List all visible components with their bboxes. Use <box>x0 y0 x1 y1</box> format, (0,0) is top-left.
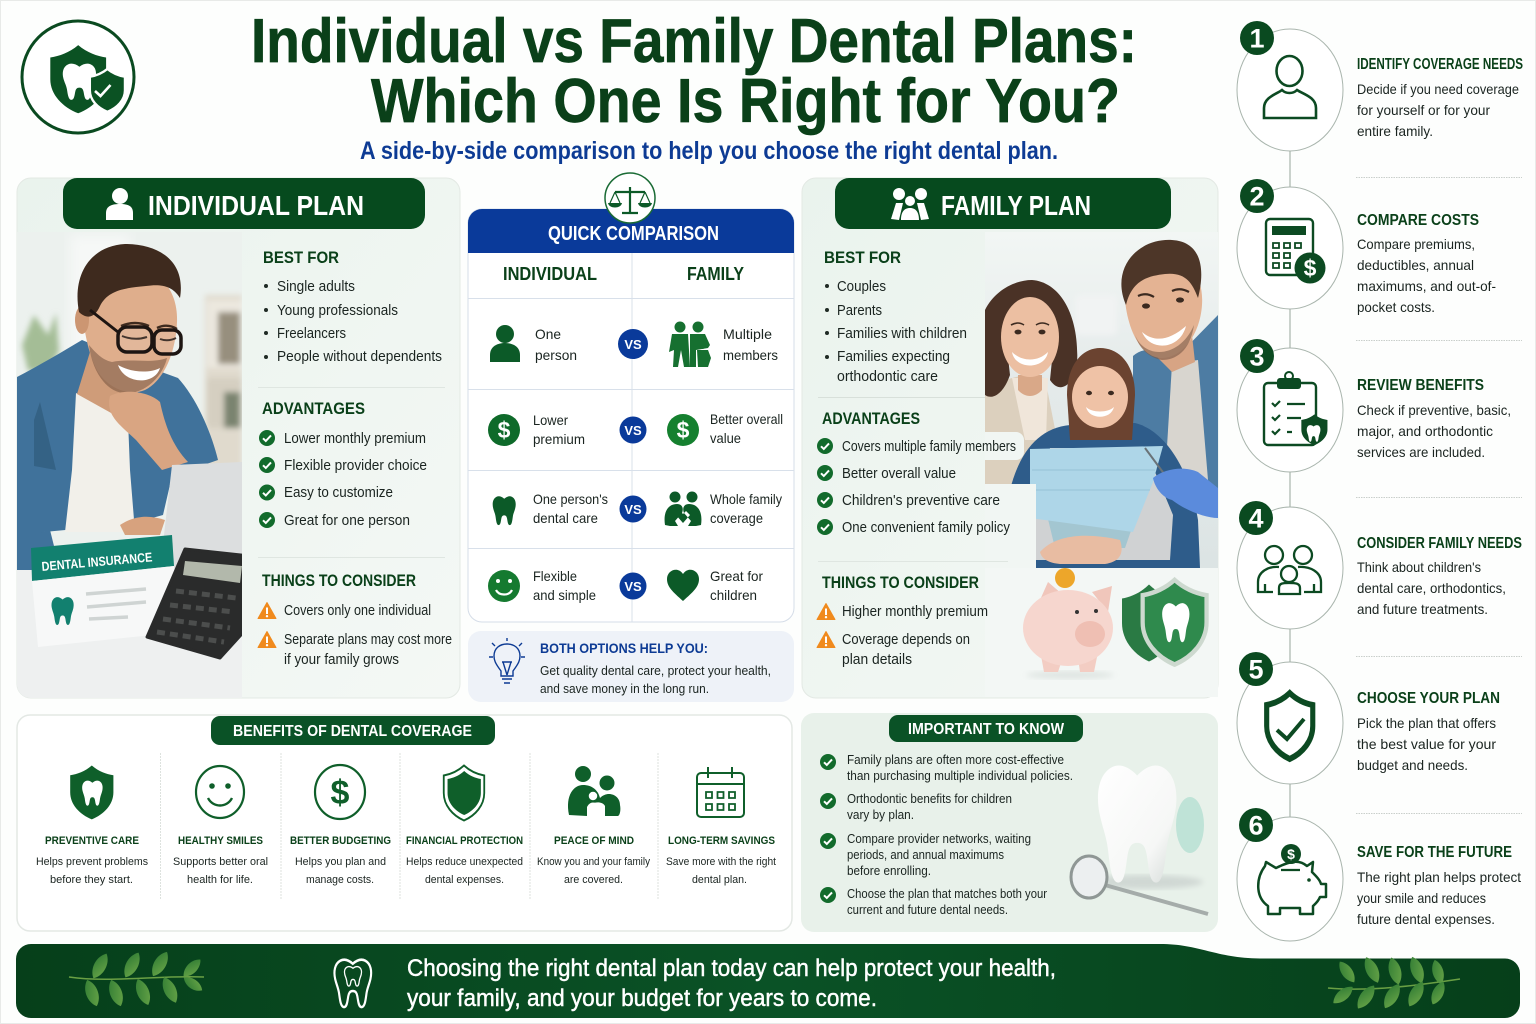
list: best for: Single adults <box>277 279 355 295</box>
list: best for: Young professionals <box>277 303 398 319</box>
step 5 <box>1237 652 1500 784</box>
benefit: preventive care: Helps prevent problems <box>36 856 148 868</box>
step 2: 2 <box>1249 182 1265 212</box>
chair <box>1010 423 1200 568</box>
row: people: person <box>535 347 577 363</box>
step 5: budget and needs. <box>1357 757 1468 773</box>
benefit: preventive care <box>36 765 148 886</box>
step 1: 1 <box>1249 24 1265 54</box>
step 1: Decide if you need coverage <box>1357 81 1519 97</box>
list: things to consider <box>258 571 452 668</box>
benefit: peace of mind <box>537 766 650 886</box>
banner: closing message <box>16 944 1520 1018</box>
step 5: CHOOSE YOUR PLAN <box>1357 690 1500 707</box>
list: important facts: Orthodontic benefits for children <box>847 792 1012 806</box>
illustration: tooth shield <box>1122 580 1207 665</box>
benefit: healthy smiles: HEALTHY SMILES <box>178 835 263 847</box>
benefit: long-term savings: LONG-TERM SAVINGS <box>668 835 775 847</box>
step 5: 5 <box>1248 654 1264 684</box>
benefit: financial protection <box>406 766 523 886</box>
benefit: long-term savings <box>666 767 776 886</box>
row: flexibility: VS <box>624 579 642 594</box>
header: individual plan: INDIVIDUAL PLAN <box>148 190 364 221</box>
icon: tooth outline <box>334 960 371 1007</box>
list: advantages: One convenient family policy <box>842 520 1011 536</box>
list: best for: People without dependents <box>277 349 442 365</box>
panel: benefits of dental coverage <box>17 715 792 931</box>
row: premium: Better overall <box>710 411 783 427</box>
header: benefits <box>211 716 495 745</box>
list: advantages: ADVANTAGES <box>262 399 365 418</box>
step 1: for yourself or for your <box>1357 102 1490 118</box>
benefit: healthy smiles: Supports better oral <box>173 856 268 868</box>
illustration: tooth and dental mirror <box>1071 766 1208 914</box>
row: care: VS <box>624 502 642 517</box>
list: advantages: Flexible provider choice <box>284 458 427 474</box>
step 6: 6 <box>1248 810 1264 840</box>
benefit: better budgeting <box>290 765 391 886</box>
step 2: $ <box>1304 255 1317 281</box>
benefit: better budgeting: Helps you plan and <box>295 856 386 868</box>
step 6: SAVE FOR THE FUTURE <box>1357 844 1512 861</box>
row: care: Whole family <box>710 491 782 507</box>
icon: left leaf branch <box>69 949 205 1008</box>
benefit: preventive care: before they start. <box>50 874 133 886</box>
row: people: One <box>535 326 561 342</box>
title: Which One Is Right for You? <box>371 67 1120 136</box>
list: best for: BEST FOR <box>824 248 901 267</box>
list: advantages <box>259 399 427 529</box>
header: individual plan <box>63 178 425 229</box>
benefit: financial protection: FINANCIAL PROTECTION <box>406 835 523 847</box>
list: important facts: Choose the plan that matches both your <box>847 887 1047 901</box>
row: premium: VS <box>624 423 642 438</box>
list: advantages: Children's preventive care <box>842 493 1000 509</box>
list: advantages: Better overall value <box>842 466 956 482</box>
list: things to consider <box>817 573 988 668</box>
row: people: VS <box>624 337 642 352</box>
step 2: deductibles, annual <box>1357 257 1474 273</box>
benefit: financial protection: Helps reduce unexpected <box>406 856 523 868</box>
list: important facts: than purchasing multiple individual policies. <box>847 769 1073 783</box>
benefit: financial protection: dental expenses. <box>425 874 504 886</box>
list: things to consider: THINGS TO CONSIDER <box>262 571 416 590</box>
girl <box>1067 348 1135 440</box>
list: important facts: current and future dental needs. <box>847 903 1008 917</box>
step 4: Think about children's <box>1357 559 1481 575</box>
illustration: piggy bank <box>1023 568 1114 679</box>
step 6: your smile and reduces <box>1357 890 1486 906</box>
header: important <box>889 715 1083 742</box>
step 4: and future treatments. <box>1357 601 1488 617</box>
list: important facts: before enrolling. <box>847 864 931 878</box>
benefit: healthy smiles <box>173 766 268 886</box>
man <box>1133 315 1218 500</box>
row: care: One person's <box>533 491 608 507</box>
benefit: peace of mind: PEACE OF MIND <box>554 835 634 847</box>
benefit: preventive care: PREVENTIVE CARE <box>45 835 139 847</box>
steps column <box>1237 21 1523 941</box>
step 1 <box>1237 21 1523 151</box>
cut-out behind family advantages <box>985 432 1036 570</box>
list: things to consider: Higher monthly premium <box>842 604 988 620</box>
row: people <box>490 322 778 367</box>
header: family plan: FAMILY PLAN <box>941 190 1091 221</box>
step 6: The right plan helps protect <box>1357 869 1521 885</box>
list: things to consider: Coverage depends on <box>842 632 970 648</box>
benefit: better budgeting: BETTER BUDGETING <box>290 835 391 847</box>
row: premium: Lower <box>533 412 568 428</box>
row: premium: $ <box>677 417 690 443</box>
list: advantages: Easy to customize <box>284 485 393 501</box>
list: best for <box>263 248 442 365</box>
benefit: long-term savings: dental plan. <box>692 874 747 886</box>
benefit: peace of mind: are covered. <box>564 874 623 886</box>
subtitle: A side-by-side comparison to help you choose the right dental plan. <box>360 137 1058 165</box>
row: premium: value <box>710 430 741 446</box>
callout: both options help you: BOTH OPTIONS HELP YOU: <box>540 640 708 656</box>
step 3: services are included. <box>1357 444 1485 460</box>
icon: balance scale <box>605 173 655 223</box>
list: best for: BEST FOR <box>263 248 339 267</box>
step 6: future dental expenses. <box>1357 911 1495 927</box>
step 4: dental care, orthodontics, <box>1357 580 1506 596</box>
banner text <box>407 955 1056 1012</box>
step 1: entire family. <box>1357 123 1433 139</box>
panel: quick comparison <box>468 173 794 622</box>
panel: family plan <box>802 178 1218 698</box>
benefit: better budgeting: manage costs. <box>306 874 374 886</box>
step 3: REVIEW BENEFITS <box>1357 377 1484 394</box>
list: important facts: Compare provider networks, waiting <box>847 832 1031 846</box>
step 2: maximums, and out-of- <box>1357 278 1496 294</box>
step 2: Compare premiums, <box>1357 236 1475 252</box>
row: flexibility <box>488 568 763 603</box>
row: flexibility: Great for <box>710 568 763 584</box>
list: important facts: vary by plan. <box>847 808 914 822</box>
list: advantages: Covers multiple family members <box>842 439 1016 455</box>
panel: important to know <box>801 713 1218 932</box>
row: flexibility: Flexible <box>533 568 577 584</box>
icon: right leaf branch <box>1328 955 1460 1012</box>
benefit: better budgeting: $ <box>331 774 350 812</box>
panel: quick comparison: INDIVIDUAL <box>503 264 597 284</box>
step 6: $ <box>1287 846 1295 862</box>
row: care: dental care <box>533 510 598 526</box>
benefit: long-term savings: Save more with the right <box>666 856 776 868</box>
header: family plan <box>835 178 1171 229</box>
step 4: 4 <box>1248 504 1264 534</box>
list: important facts <box>820 753 1073 917</box>
step 3 <box>1237 339 1511 472</box>
list: best for: Families with children <box>837 326 967 342</box>
row: premium: premium <box>533 431 585 447</box>
row: flexibility: children <box>710 587 757 603</box>
list: things to consider: plan details <box>842 652 912 668</box>
list: things to consider: Covers only one individual <box>284 603 431 619</box>
row: people: members <box>723 347 778 363</box>
callout: both options help you: Get quality dental care, protect your health, <box>540 663 771 678</box>
panel: quick comparison: FAMILY <box>687 264 744 284</box>
insurance card <box>31 535 181 647</box>
row: care: coverage <box>710 510 763 526</box>
list: advantages <box>817 409 1016 536</box>
step 6 <box>1237 808 1521 941</box>
woman <box>985 376 1055 484</box>
benefit: peace of mind: Know you and your family <box>537 856 650 868</box>
header: benefits: BENEFITS OF DENTAL COVERAGE <box>233 723 472 740</box>
list: things to consider: if your family grows <box>284 652 399 668</box>
list: best for: Couples <box>837 279 886 295</box>
calculator <box>147 549 250 658</box>
row: flexibility: and simple <box>533 587 596 603</box>
list: best for: orthodontic care <box>837 369 938 385</box>
list: advantages: Lower monthly premium <box>284 431 426 447</box>
callout: both options help you <box>468 631 794 702</box>
header: important: IMPORTANT TO KNOW <box>908 721 1065 738</box>
list: important facts: periods, and annual maximums <box>847 848 1004 862</box>
list: advantages: ADVANTAGES <box>822 409 920 428</box>
banner text: Choosing the right dental plan today can help protect your health, <box>407 955 1056 982</box>
list: best for: Freelancers <box>277 326 346 342</box>
list: important facts: Family plans are often more cost-effective <box>847 753 1064 767</box>
list: best for: Parents <box>837 303 882 319</box>
title: Individual vs Family Dental Plans: <box>251 7 1137 76</box>
step 5: the best value for your <box>1357 736 1496 752</box>
step 3: major, and orthodontic <box>1357 423 1493 439</box>
list: advantages: Great for one person <box>284 513 410 529</box>
row: care <box>493 491 782 526</box>
list: best for: Families expecting <box>837 349 950 365</box>
list: things to consider: Separate plans may cost more <box>284 632 452 648</box>
step 2: pocket costs. <box>1357 299 1435 315</box>
panel: individual plan <box>17 178 460 698</box>
logo: dental shield badge <box>22 21 134 133</box>
step 3: 3 <box>1249 342 1265 372</box>
panel: quick comparison: QUICK COMPARISON <box>548 223 719 245</box>
step 3: Check if preventive, basic, <box>1357 402 1511 418</box>
step 2: COMPARE COSTS <box>1357 212 1479 229</box>
title <box>251 7 1137 136</box>
insurance card: DENTAL INSURANCE <box>41 549 153 574</box>
row: people: Multiple <box>723 326 772 342</box>
callout: both options help you: and save money in the long run. <box>540 681 709 696</box>
icon: light bulb <box>489 638 525 683</box>
benefit: healthy smiles: health for life. <box>187 874 253 886</box>
photo: man with dental insurance card and calculator <box>17 232 250 698</box>
list: things to consider: THINGS TO CONSIDER <box>822 573 979 592</box>
list: best for <box>824 248 967 385</box>
banner text: your family, and your budget for years to come. <box>407 985 877 1012</box>
row: premium: $ <box>498 417 511 443</box>
step 4 <box>1237 501 1522 629</box>
step 2 <box>1237 179 1496 315</box>
photo: family at the dentist <box>985 232 1218 568</box>
row: premium <box>488 411 783 447</box>
step 5: Pick the plan that offers <box>1357 715 1496 731</box>
